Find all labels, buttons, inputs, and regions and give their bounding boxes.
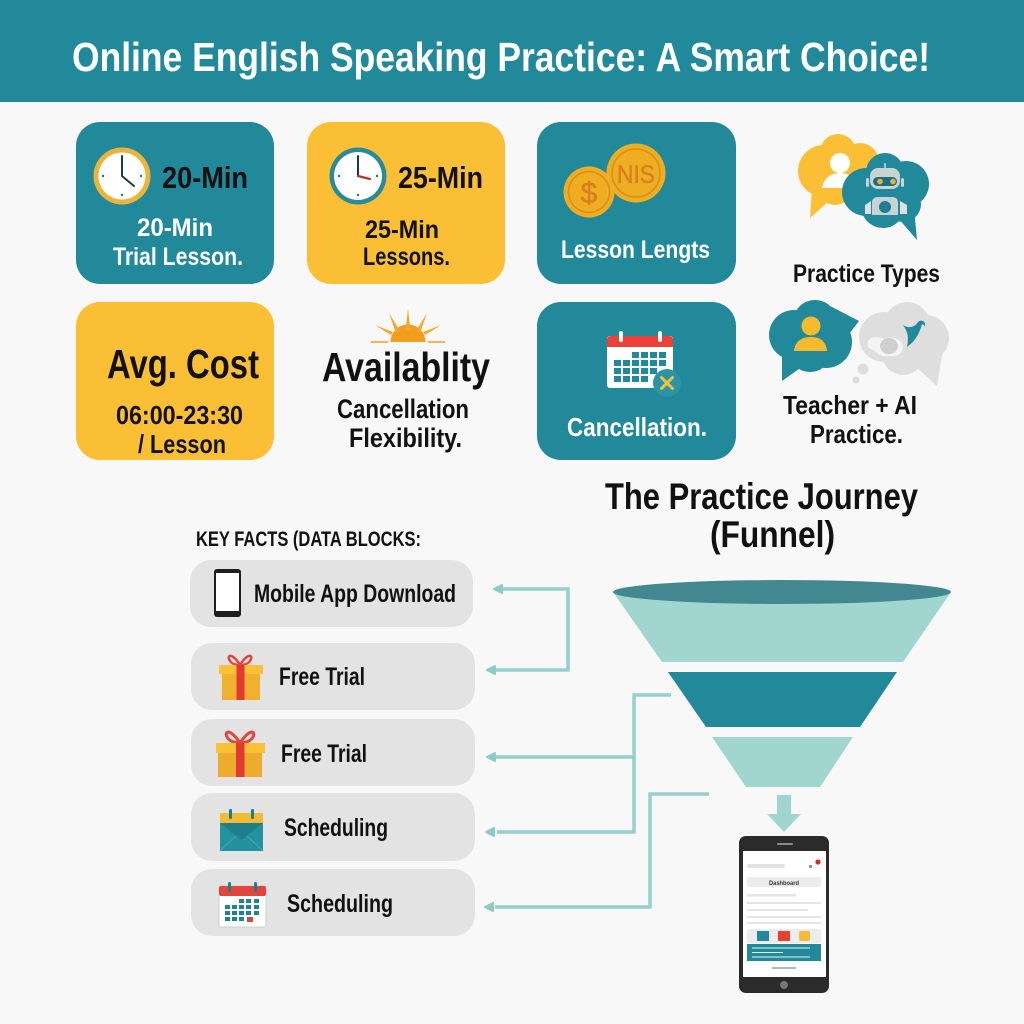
data block: scheduling 2: [191, 869, 475, 936]
label: Cancellation: Cancellation.: [567, 412, 707, 442]
label: Lesson Lengts: Lesson Lengts: [561, 236, 710, 264]
label: 25-Min Lessons: [363, 216, 450, 271]
label: Scheduling: [284, 814, 388, 842]
icon: coins: [564, 144, 666, 218]
data block: mobile app download: [190, 560, 473, 627]
icon: smartphone with app screen: [739, 836, 829, 993]
label: Scheduling: [287, 890, 393, 918]
panel: practice types: [793, 134, 940, 288]
label: Avg. Cost: Avg. Cost: [107, 341, 259, 387]
label: Teacher + AI Practice: [783, 390, 917, 449]
icon: AI thought bubble grey: [852, 302, 949, 386]
funnel stage 3: [712, 737, 853, 787]
label: Availablity: Availablity: [322, 344, 490, 390]
label: Free Trial: [281, 740, 367, 768]
icon: gift: [219, 656, 263, 700]
funnel stage 2: [668, 672, 897, 727]
icon: teacher bubble teal: [769, 300, 859, 381]
panel: availability: [322, 308, 490, 453]
label: Mobile App Download: [254, 580, 456, 608]
label: 25-Min Lessons: Lessons.: [363, 243, 450, 271]
panel: lesson lengths: [537, 122, 736, 284]
label: 20-Min heading: 20-Min: [162, 160, 248, 195]
chart: funnel: [613, 580, 951, 787]
icon: smartphone with app screen: Dashboard: [769, 881, 799, 887]
label: 20-Min Trial Lesson: [113, 214, 243, 271]
icon: coins: NIS: [617, 161, 655, 189]
label: Teacher + AI Practice: Practice.: [810, 419, 903, 449]
icon: calendar: [219, 882, 266, 927]
icon: envelope calendar: [220, 809, 263, 851]
label: 06:00-23:30 / Lesson: 06:00-23:30: [116, 400, 243, 430]
icon: clock teal: [330, 148, 386, 204]
panel: average cost: [76, 302, 274, 460]
icon: sun: [371, 308, 445, 342]
data block: free trial 1: [191, 643, 475, 710]
label: Cancellation Flexibility: Flexibility.: [349, 423, 462, 453]
label: 20-Min Trial Lesson: 20-Min: [137, 214, 213, 242]
label: 25-Min heading: 25-Min: [398, 160, 483, 195]
label: Practice Types: Practice Types: [793, 260, 940, 288]
label: 20-Min Trial Lesson: Trial Lesson.: [113, 243, 243, 271]
icon: teacher speech bubble yellow: [798, 134, 879, 218]
icon: robot speech bubble teal: [842, 153, 929, 240]
icon: gift: [216, 732, 265, 777]
connector arrows: [485, 585, 709, 911]
data block: free trial 2: [191, 719, 475, 786]
heading: practice journey: The Practice Journey: [605, 476, 918, 517]
label: Cancellation Flexibility: [337, 394, 469, 453]
icon: mobile phone: [214, 569, 241, 617]
icon: clock gold: [94, 148, 150, 204]
panel: teacher + AI practice: [769, 300, 949, 449]
data block: scheduling 1: [191, 793, 475, 861]
heading: practice journey: [605, 476, 918, 555]
label: 25-Min Lessons: 25-Min: [365, 216, 439, 244]
label: Teacher + AI Practice: Teacher + AI: [783, 390, 917, 420]
icon: calendar with cancel badge: [607, 331, 681, 397]
arrow: funnel to phone: [767, 795, 801, 832]
label: 06:00-23:30 / Lesson: [116, 400, 243, 459]
heading: key facts: KEY FACTS (DATA BLOCKS:: [196, 528, 421, 551]
funnel stage 1: [613, 580, 951, 662]
label: Free Trial: [279, 663, 365, 691]
icon: coins: $: [581, 177, 598, 210]
label: 06:00-23:30 / Lesson: / Lesson: [138, 429, 226, 459]
label: Cancellation Flexibility: Cancellation: [337, 394, 469, 424]
panel: 25-min lessons: [307, 122, 505, 284]
panel: 20-min trial lesson: [76, 122, 274, 284]
header banner: [0, 0, 1024, 102]
panel: cancellation: [537, 302, 736, 460]
heading: practice journey: (Funnel): [710, 514, 835, 555]
